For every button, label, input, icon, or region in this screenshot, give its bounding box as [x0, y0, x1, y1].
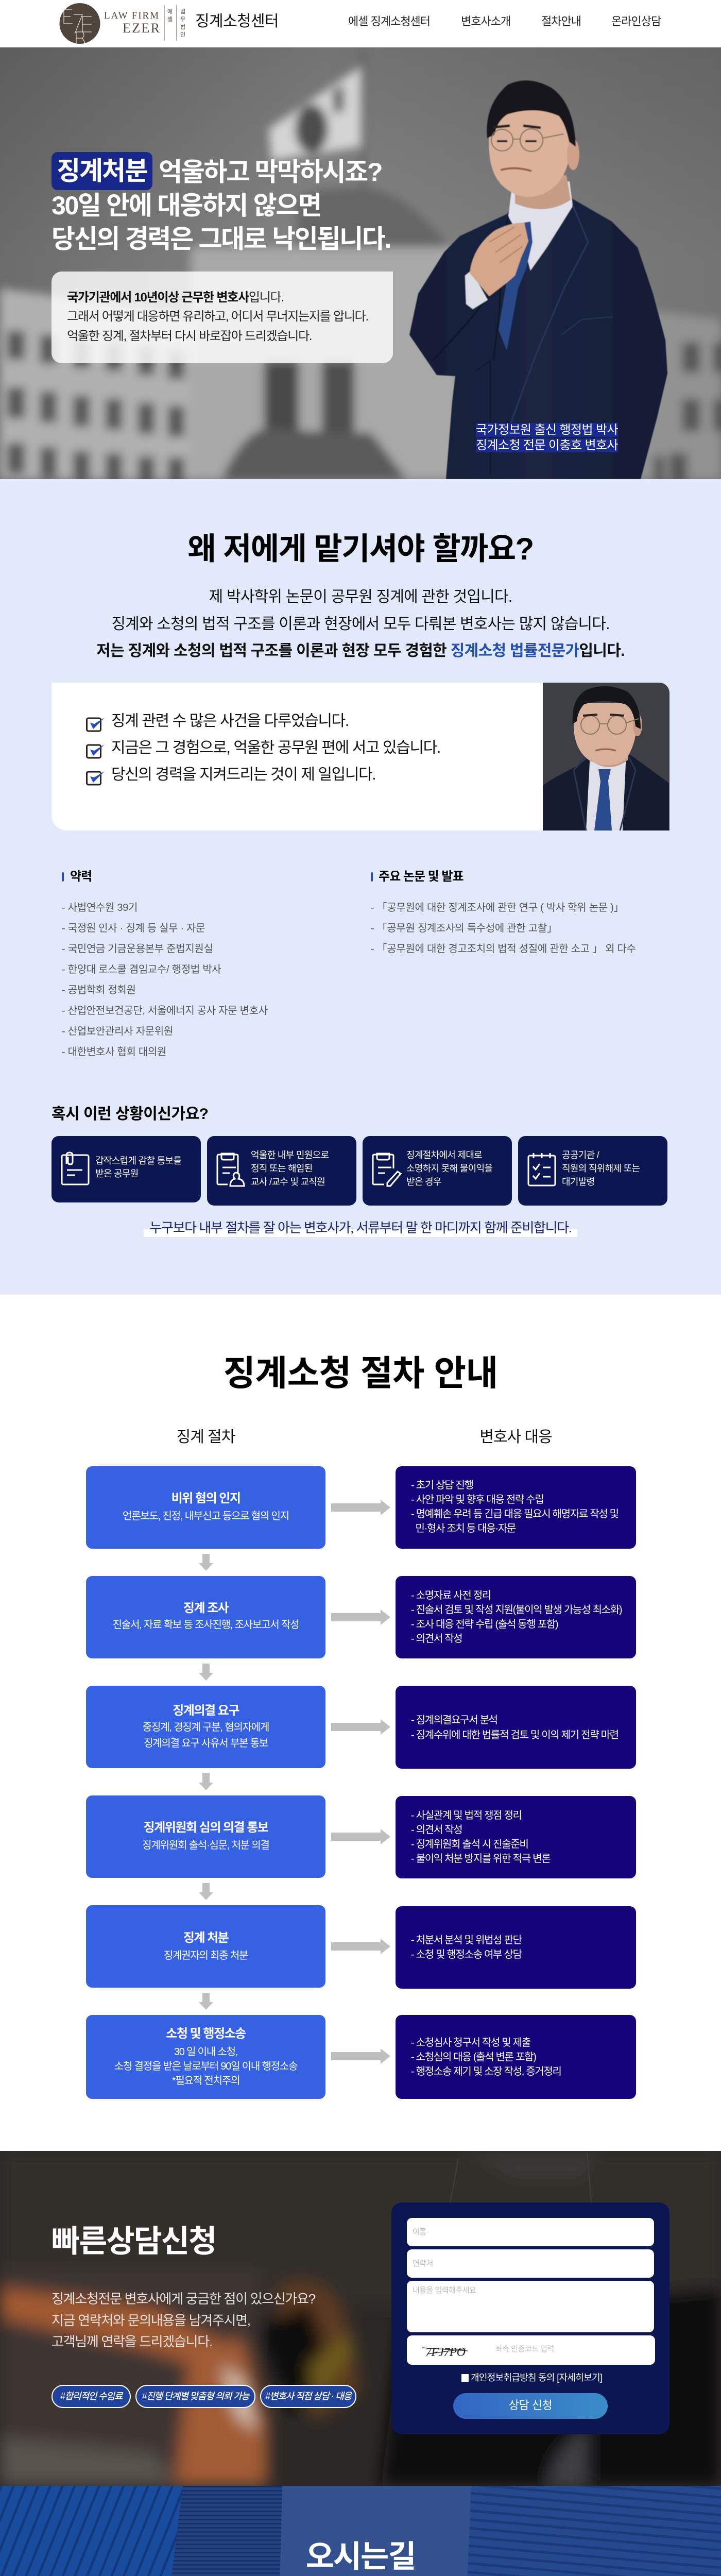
- paper list: - 「공무원 징계조사의 특수성에 관한 고찰」: [371, 923, 557, 934]
- response 2: - 소명자료 사전 정리: [411, 1590, 491, 1601]
- hashtag: fees: [52, 2385, 131, 2408]
- step 5: 징계권자의 최종 처분: [164, 1950, 248, 1961]
- arrow: step 5 to response 5: [331, 1939, 390, 1954]
- arrow: step 1 to response 1: [331, 1500, 390, 1515]
- career list: - 국민연금 기금운용본부 준법지원실: [62, 943, 213, 955]
- hero section: [0, 47, 721, 479]
- response 6: - 소청심의 대응 (출석 변론 포함): [411, 2052, 536, 2063]
- response 3: - 징계의결요구서 분석: [411, 1715, 497, 1726]
- input: phone: [407, 2249, 654, 2278]
- situation card 2: 억울한 내부 민원으로: [251, 1150, 329, 1160]
- response 1: - 사안 파악 및 향후 대응 전략 수립: [411, 1494, 543, 1505]
- response 1: 민·형사 조치 등 대응·자문: [415, 1523, 516, 1534]
- input: phone: 연락처: [413, 2259, 433, 2268]
- intro text: 고객님께 연락을 드리겠습니다.: [52, 2334, 212, 2349]
- response 5: - 처분서 분석 및 위법성 판단: [411, 1935, 522, 1946]
- intro text box: [52, 272, 393, 363]
- situation card 2: 교사 /교수 및 교직원: [251, 1177, 325, 1187]
- logo: law firm ezer: EZER: [123, 21, 160, 36]
- logo: law firm ezer: 인: [180, 30, 185, 39]
- step 6: 소청 결정을 받은 날로부터 90일 이내 행정소송: [114, 2061, 297, 2072]
- response 1: - 초기 상담 진행: [411, 1480, 473, 1491]
- lawyer caption: 국가정보원 출신 행정법 박사: [476, 423, 618, 437]
- career list: - 대한변호사 협회 대의원: [62, 1046, 166, 1058]
- response 4: [396, 1796, 636, 1878]
- column heading: procedure: 징계 절차: [177, 1429, 235, 1446]
- submit button: [453, 2393, 608, 2419]
- step 4: 징계위원회 출석·심문, 처분 의결: [142, 1840, 269, 1851]
- hashtag: direct lawyer: [260, 2385, 356, 2408]
- submit button: 상담 신청: [509, 2399, 552, 2412]
- consultation form: [391, 2202, 670, 2434]
- highlighted word: [52, 152, 152, 190]
- arrow: step 3 to response 3: [331, 1719, 390, 1735]
- arrow: step 5 to step 6: [199, 1993, 213, 2010]
- navigation: [348, 15, 661, 28]
- response 6: - 행정소송 제기 및 소장 작성, 증거정리: [411, 2066, 561, 2077]
- arrow: step 4 to response 4: [331, 1829, 390, 1844]
- response 4: - 불이익 처분 방지를 위한 적극 변론: [411, 1853, 550, 1865]
- input: captcha: [407, 2335, 655, 2365]
- header: [0, 0, 721, 47]
- lawyer headshot: [543, 683, 670, 831]
- panel: check list with portrait: [52, 683, 670, 831]
- response 5: - 소청 및 행정소송 여부 상담: [411, 1949, 522, 1960]
- response 6: - 소청심사 청구서 작성 및 제출: [411, 2037, 530, 2048]
- bio heading: papers: 주요 논문 및 발표: [379, 870, 464, 884]
- input: captcha: 좌측 인증코드 입력: [495, 2345, 554, 2353]
- heading: 빠른상담신청: [52, 2224, 216, 2259]
- background: glass buildings: [0, 2486, 721, 2576]
- icon: checklist calendar: [527, 1153, 556, 1186]
- step 2: [86, 1576, 325, 1658]
- arrow: step 3 to step 4: [199, 1773, 213, 1790]
- intro paragraph: 제 박사학위 논문이 공무원 징계에 관한 것입니다.: [209, 588, 512, 605]
- icon: clipboard with person: [216, 1153, 245, 1187]
- lawyer caption: 징계소청 전문 이충호 변호사: [476, 438, 618, 452]
- situation card 4: 직원의 직위해제 또는: [562, 1163, 640, 1174]
- response 1: - 명예훼손 우려 등 긴급 대응 필요시 해명자료 작성 및: [411, 1509, 619, 1520]
- career list: [62, 902, 268, 1058]
- response 4: - 징계위원회 출석 시 진술준비: [411, 1839, 528, 1850]
- logo: law firm ezer: 셀: [167, 15, 173, 23]
- situation card 2: [207, 1136, 356, 1206]
- situation card 3: 소명하지 못해 불이익을: [406, 1163, 492, 1174]
- step 6: *필요적 전치주의: [172, 2075, 239, 2087]
- step 1: 비위 혐의 인지: [171, 1492, 240, 1505]
- response 3: - 징계수위에 대한 법률적 검토 및 이의 제기 전략 마련: [411, 1730, 619, 1741]
- arrow: step 1 to step 2: [199, 1554, 213, 1571]
- step 6: 소청 및 행정소송: [166, 2027, 246, 2041]
- privacy agreement: 개인정보취급방침 동의 [자세히보기]: [471, 2372, 602, 2383]
- headline: 억울하고 막막하시죠?: [159, 158, 382, 187]
- lawyer caption: [476, 423, 618, 452]
- arrow: step 2 to response 2: [331, 1609, 390, 1625]
- step 3: 징계의결 요구: [173, 1704, 239, 1718]
- heading: 오시는길: [306, 2539, 415, 2574]
- logo: law firm ezer: [60, 3, 185, 44]
- situation card 4: [518, 1136, 667, 1206]
- navigation: 변호사소개: [461, 15, 510, 28]
- navigation: 절차안내: [541, 15, 581, 28]
- step 2: 징계 조사: [183, 1601, 228, 1615]
- situation card 1: 갑작스럽게 감찰 통보를: [95, 1156, 181, 1166]
- step 4: 징계위원회 심의 의결 통보: [144, 1821, 268, 1835]
- situation card 4: 대기발령: [562, 1177, 594, 1187]
- intro paragraph: 저는 징계와 소청의 법적 구조를 이론과 현장 모두 경험한 징계소청 법률전문가입니다.: [96, 642, 625, 659]
- hashtag: staged service: [135, 2385, 255, 2408]
- response 2: [396, 1576, 636, 1658]
- step 4: [86, 1795, 325, 1878]
- hashtag: fees: #합리적인 수임료: [60, 2391, 122, 2401]
- background: blurred gavel: [0, 2151, 721, 2486]
- column heading: lawyer response: 변호사 대응: [479, 1429, 552, 1446]
- headline: 당신의 경력은 그대로 낙인됩니다.: [52, 225, 390, 253]
- career list: - 사법연수원 39기: [62, 902, 138, 913]
- navigation: 온라인상담: [611, 15, 661, 28]
- step 3: 중징계, 경징계 구분, 혐의자에게: [143, 1722, 269, 1733]
- highlighted word: 징계처분: [57, 157, 147, 185]
- paper list: [371, 902, 636, 955]
- logo: law firm ezer: 무: [180, 15, 185, 23]
- arrow: step 4 to step 5: [199, 1883, 213, 1900]
- section: procedure title: 징계소청 절차 안내: [223, 1354, 498, 1393]
- step 1: [86, 1466, 325, 1549]
- icon: clipboard with pencil: [372, 1153, 402, 1187]
- input: message: [407, 2281, 654, 2332]
- intro text box: 국가기관에서 10년이상 근무한 변호사입니다.: [67, 291, 284, 304]
- check items: 지금은 그 경험으로, 억울한 공무원 편에 서고 있습니다.: [111, 739, 440, 756]
- step 1: 언론보도, 진정, 내부신고 등으로 혐의 인지: [123, 1511, 289, 1522]
- situation card 3: 징계절차에서 제대로: [406, 1150, 482, 1160]
- career list: - 공법학회 정회원: [62, 985, 136, 996]
- intro text: [52, 2291, 315, 2349]
- intro text box: 그래서 어떻게 대응하면 유리하고, 어디서 무너지는지를 압니다.: [67, 310, 368, 324]
- navigation: 에셀 징계소청센터: [348, 15, 430, 28]
- step 3: 징계의결 요구 사유서 부본 통보: [144, 1738, 268, 1749]
- situation card 2: 정직 또는 해임된: [251, 1163, 313, 1174]
- situation card 3: 받은 경우: [406, 1177, 441, 1187]
- section: quick consultation: [0, 2151, 721, 2486]
- career list: - 산업안전보건공단, 서울에너지 공사 자문 변호사: [62, 1005, 268, 1016]
- arrow: step 6 to response 6: [331, 2048, 390, 2064]
- intro paragraph: 징계와 소청의 법적 구조를 이론과 현장에서 모두 다뤄본 변호사는 많지 않습니다.: [111, 616, 610, 633]
- heading: 왜 저에게 맡기셔야 할까요?: [187, 532, 534, 566]
- icon: clipboard with clip: [61, 1152, 90, 1185]
- logo: law firm ezer: 에: [167, 7, 173, 15]
- intro text: 지금 연락처와 문의내용을 남겨주시면,: [52, 2313, 250, 2328]
- situation card 3: [363, 1136, 512, 1206]
- career list: - 한양대 로스쿨 겸임교수/ 행정법 박사: [62, 964, 221, 975]
- response 5: [396, 1906, 636, 1989]
- headline: [52, 152, 390, 253]
- intro text: 징계소청전문 변호사에게 궁금한 점이 있으신가요?: [52, 2291, 315, 2307]
- step 2: 진술서, 자료 확보 등 조사진행, 조사보고서 작성: [113, 1619, 299, 1631]
- lawyer portrait: [409, 80, 668, 479]
- arrow: step 2 to step 3: [199, 1664, 213, 1681]
- step 3: [86, 1686, 325, 1768]
- intro paragraph: [96, 588, 625, 659]
- hashtag: staged service: #진행 단계별 맞춤형 의뢰 가능: [142, 2391, 249, 2401]
- situation card 4: 공공기관 /: [562, 1150, 599, 1160]
- closing note with highlight: 누구보다 내부 절차를 잘 아는 변호사가, 서류부터 말 한 마디까지 함께 준비합니다.: [150, 1220, 571, 1235]
- career list: - 산업보안관리사 자문위원: [62, 1026, 173, 1037]
- logo: law firm ezer: 법: [180, 23, 185, 31]
- response 2: - 조사 대응 전략 수립 (출석 동행 포함): [411, 1619, 558, 1630]
- step 6: [86, 2015, 325, 2099]
- logo: law firm ezer: 법: [180, 7, 185, 15]
- intro text box: 억울한 징계, 절차부터 다시 바로잡아 드리겠습니다.: [67, 329, 312, 343]
- situations heading: 혹시 이런 상황이신가요?: [52, 1106, 208, 1123]
- paper list: - 「공무원에 대한 징계조사에 관한 연구 ( 박사 학위 논문 )」: [371, 902, 624, 913]
- response 3: [396, 1686, 636, 1769]
- input: name: 이름: [413, 2228, 426, 2236]
- check items: 징계 관련 수 많은 사건을 다루었습니다.: [111, 713, 349, 730]
- situation card 1: 받은 공무원: [95, 1168, 139, 1179]
- check items: [86, 713, 440, 785]
- section: why choose: [0, 479, 721, 1295]
- bio heading: career: 약력: [70, 870, 92, 884]
- response 6: [396, 2015, 636, 2099]
- hashtag: direct lawyer: #변호사 직접 상담 · 대응: [265, 2391, 351, 2401]
- headline: 30일 안에 대응하지 않으면: [52, 191, 321, 220]
- step 5: 징계 처분: [183, 1931, 228, 1945]
- input: message: 내용을 입력해주세요: [413, 2286, 476, 2295]
- step 6: 30 일 이내 소청,: [174, 2046, 237, 2058]
- response 4: - 의견서 작성: [411, 1824, 462, 1836]
- section: directions: [0, 2486, 721, 2576]
- response 4: - 사실관계 및 법적 쟁점 정리: [411, 1810, 522, 1821]
- step 5: [86, 1905, 325, 1988]
- response 2: - 의견서 작성: [411, 1633, 462, 1645]
- check items: 당신의 경력을 지켜드리는 것이 제 일입니다.: [111, 766, 375, 783]
- response 1: [396, 1466, 636, 1549]
- site name: 징계소청센터: [195, 13, 279, 30]
- response 2: - 진술서 검토 및 작성 지원(불이익 발생 가능성 최소화): [411, 1604, 622, 1616]
- career list: - 국정원 인사 · 징계 등 실무 · 자문: [62, 923, 205, 934]
- paper list: - 「공무원에 대한 경고조치의 법적 성질에 관한 소고 」 외 다수: [371, 943, 636, 955]
- input: name: [407, 2218, 654, 2246]
- logo: law firm ezer: LAW FIRM: [104, 10, 159, 21]
- situation card 1: [52, 1136, 201, 1202]
- hero background: blurred national assembly and flag: [0, 47, 721, 479]
